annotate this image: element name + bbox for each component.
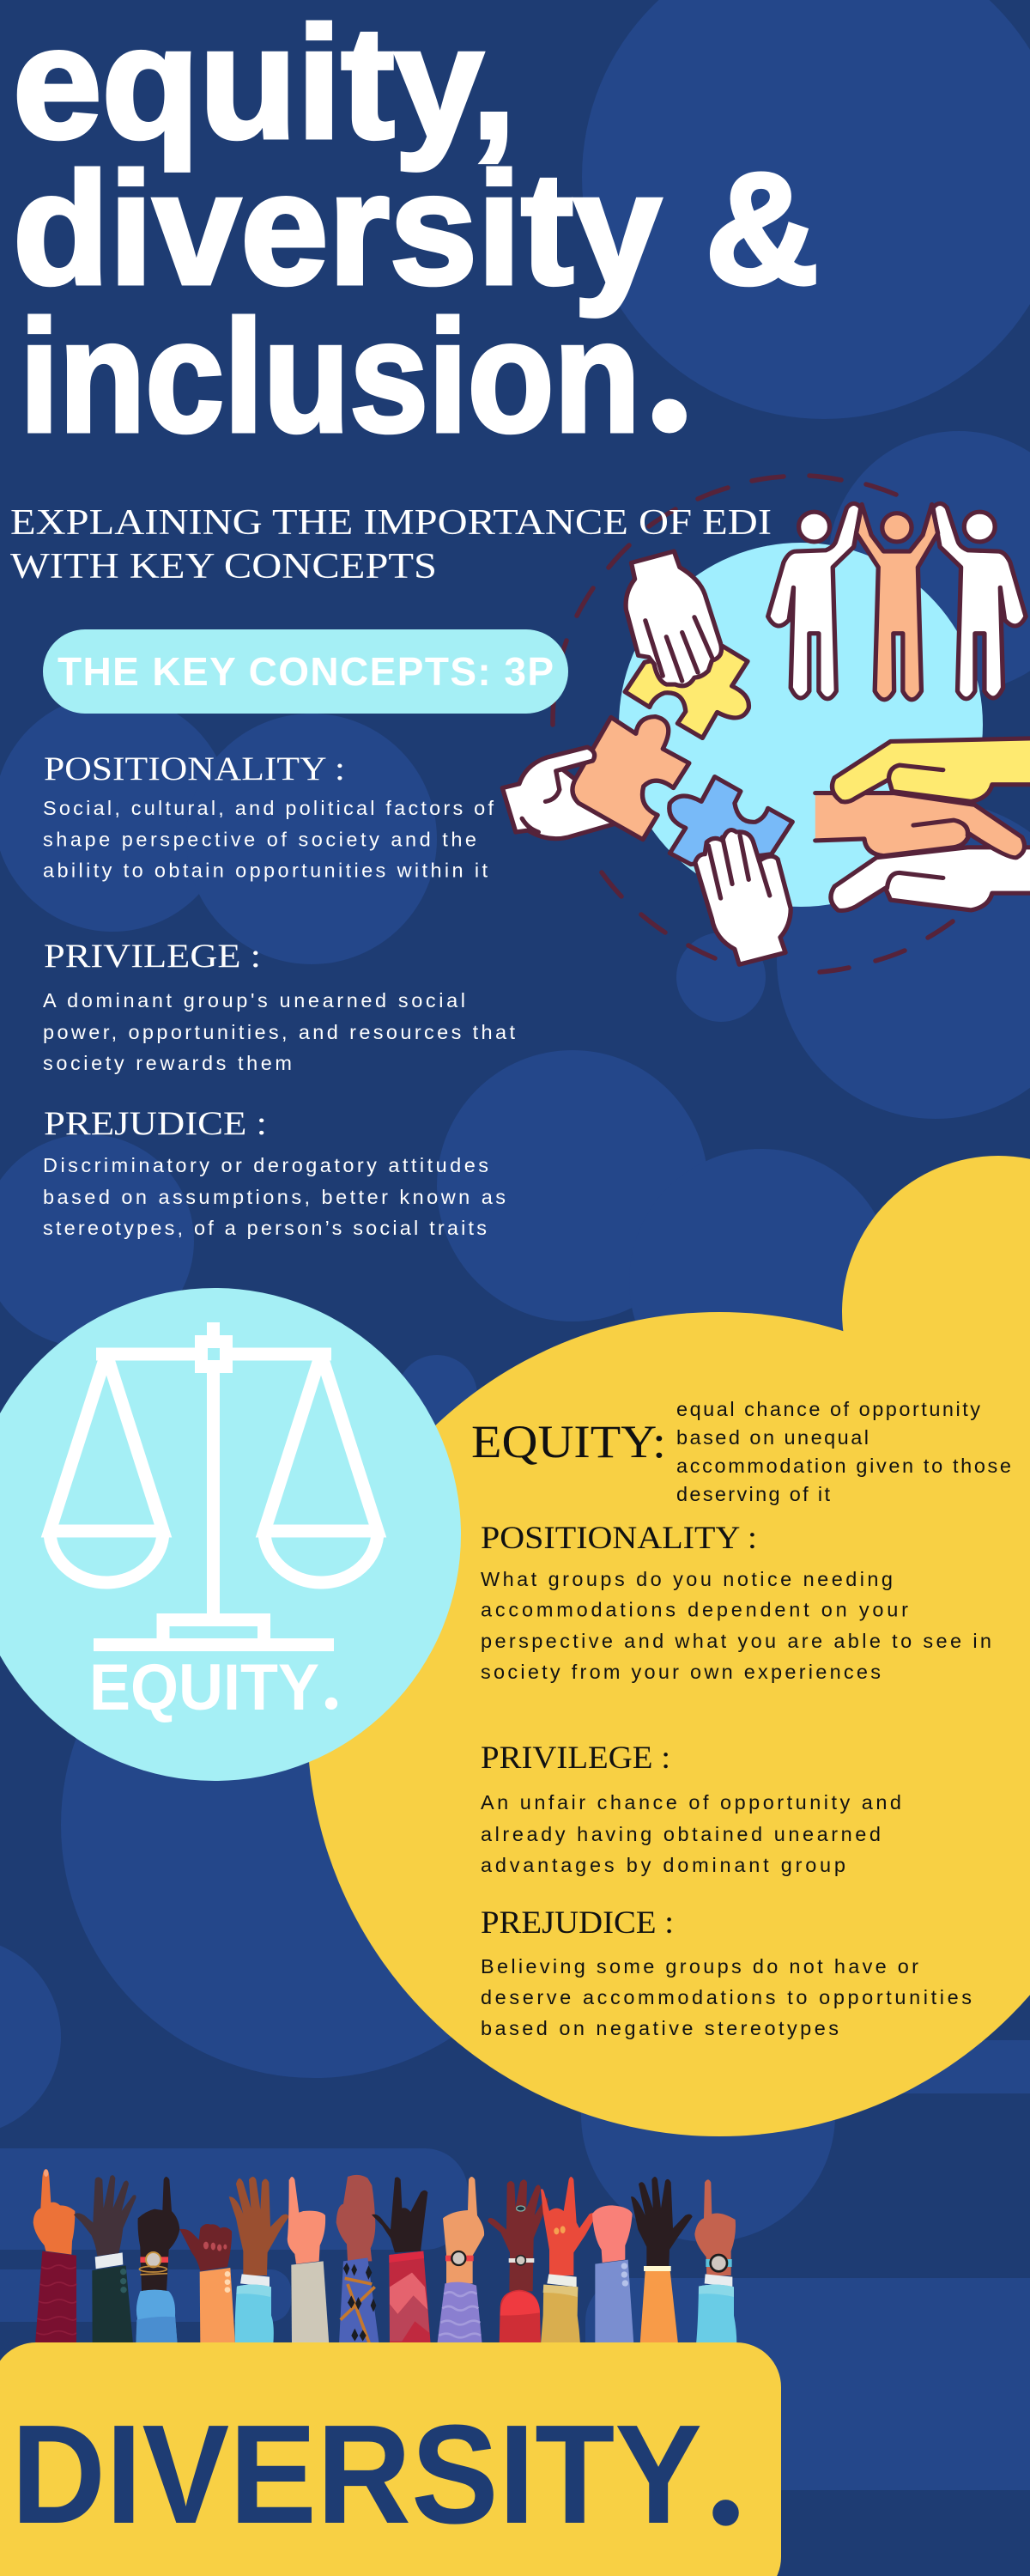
subtitle: WITH KEY CONCEPTS [10, 547, 437, 586]
icon: yellow puzzle piece [625, 646, 748, 738]
icon: left hand finger [522, 747, 595, 832]
illustration: people and puzzle hands [502, 503, 1030, 964]
positionality definition: POSITIONALITY : [44, 750, 345, 787]
icon: white hand right [831, 848, 1030, 910]
illustration: pale blue circle with dashed ring [553, 476, 983, 972]
equity circle with scales icon [0, 1288, 461, 1781]
title: diversity & [13, 141, 819, 318]
icon: top hand [626, 551, 721, 686]
positionality definition [43, 750, 494, 881]
hand 13 open [631, 2177, 693, 2344]
hand 14 pointing with watch [694, 2179, 736, 2344]
equity prejudice: PREJUDICE : [481, 1905, 674, 1941]
equity positionality: POSITIONALITY : [481, 1521, 757, 1556]
hand 6 pointing [288, 2177, 329, 2344]
equity heading and definition: accommodation given to those [676, 1455, 1011, 1477]
equity privilege: advantages by dominant group [481, 1854, 845, 1876]
equity positionality: What groups do you notice needing [481, 1568, 893, 1590]
equity privilege: An unfair chance of opportunity and [481, 1791, 901, 1814]
equity prejudice: Believing some groups do not have or [481, 1955, 918, 1978]
yellow equity panel [307, 1156, 1030, 2136]
icon: peach hand right [815, 793, 1025, 858]
hand 8 rock sign [372, 2177, 431, 2344]
equity privilege: already having obtained unearned [481, 1823, 881, 1845]
prejudice definition: stereotypes, of a person’s social traits [43, 1217, 487, 1239]
key concepts pill: THE KEY CONCEPTS: 3P [58, 649, 554, 694]
equity privilege [481, 1741, 901, 1876]
prejudice definition: PREJUDICE : [44, 1105, 267, 1142]
equity heading and definition: equal chance of opportunity [676, 1398, 980, 1420]
key concepts pill [43, 629, 568, 714]
equity privilege: PRIVILEGE : [481, 1741, 670, 1776]
hand 5 open [229, 2177, 289, 2344]
equity positionality: perspective and what you are able to see in [481, 1630, 991, 1652]
prejudice definition: Discriminatory or derogatory attitudes [43, 1154, 488, 1176]
prejudice definition: based on assumptions, better known as [43, 1186, 506, 1208]
equity positionality [481, 1521, 991, 1683]
equity prejudice [481, 1905, 972, 2039]
icon: yellow hand right [833, 738, 1030, 802]
title: inclusion [20, 289, 640, 465]
equity heading and definition: EQUITY: [471, 1416, 666, 1467]
prejudice definition [43, 1105, 506, 1239]
equity heading and definition [471, 1398, 1011, 1505]
diversity card: . [706, 2379, 746, 2559]
privilege definition: power, opportunities, and resources that [43, 1021, 515, 1043]
hand 12 fist [592, 2205, 633, 2344]
icon: three people high five [768, 503, 1026, 700]
hand 10 open with watch [488, 2179, 548, 2344]
equity prejudice: based on negative stereotypes [481, 2017, 839, 2039]
privilege definition: PRIVILEGE : [44, 938, 261, 975]
equity label: . [322, 1643, 341, 1726]
hand 11 rock sign [541, 2177, 597, 2344]
title: . [643, 242, 696, 477]
hand 7 back of hand [336, 2175, 379, 2344]
title [13, 0, 819, 477]
icon: blue puzzle piece [670, 777, 792, 865]
icon: balance scales [50, 1322, 378, 1645]
hand 9 pointing with watch [437, 2177, 484, 2344]
subtitle [10, 503, 772, 586]
equity prejudice: deserve accommodations to opportunities [481, 1986, 972, 2008]
diversity card: DIVERSITY [11, 2396, 702, 2553]
hand 1 pointing [33, 2169, 76, 2344]
privilege definition [43, 938, 515, 1074]
equity heading and definition: deserving of it [676, 1483, 830, 1505]
privilege definition: A dominant group's unearned social [43, 989, 465, 1012]
icon: bottom hand [695, 830, 791, 964]
raised hands row [33, 2169, 736, 2344]
icon: left hand [502, 757, 615, 839]
hand 2 open [74, 2175, 136, 2344]
diversity card [0, 2342, 781, 2576]
icon: orange puzzle piece [573, 717, 689, 840]
positionality definition: Social, cultural, and political factors of [43, 797, 494, 819]
positionality definition: ability to obtain opportunities within it [43, 859, 488, 881]
privilege definition: society rewards them [43, 1052, 292, 1074]
hand 4 fist [179, 2224, 235, 2344]
equity heading and definition: based on unequal [676, 1426, 869, 1449]
equity positionality: accommodations dependent on your [481, 1599, 908, 1621]
subtitle: EXPLAINING THE IMPORTANCE OF EDI [10, 503, 772, 543]
title: equity, [13, 0, 516, 172]
positionality definition: shape perspective of society and the [43, 828, 476, 850]
equity label: EQUITY [89, 1651, 319, 1724]
equity positionality: society from your own experiences [481, 1661, 881, 1683]
hand 3 pointing with watch [136, 2177, 179, 2344]
